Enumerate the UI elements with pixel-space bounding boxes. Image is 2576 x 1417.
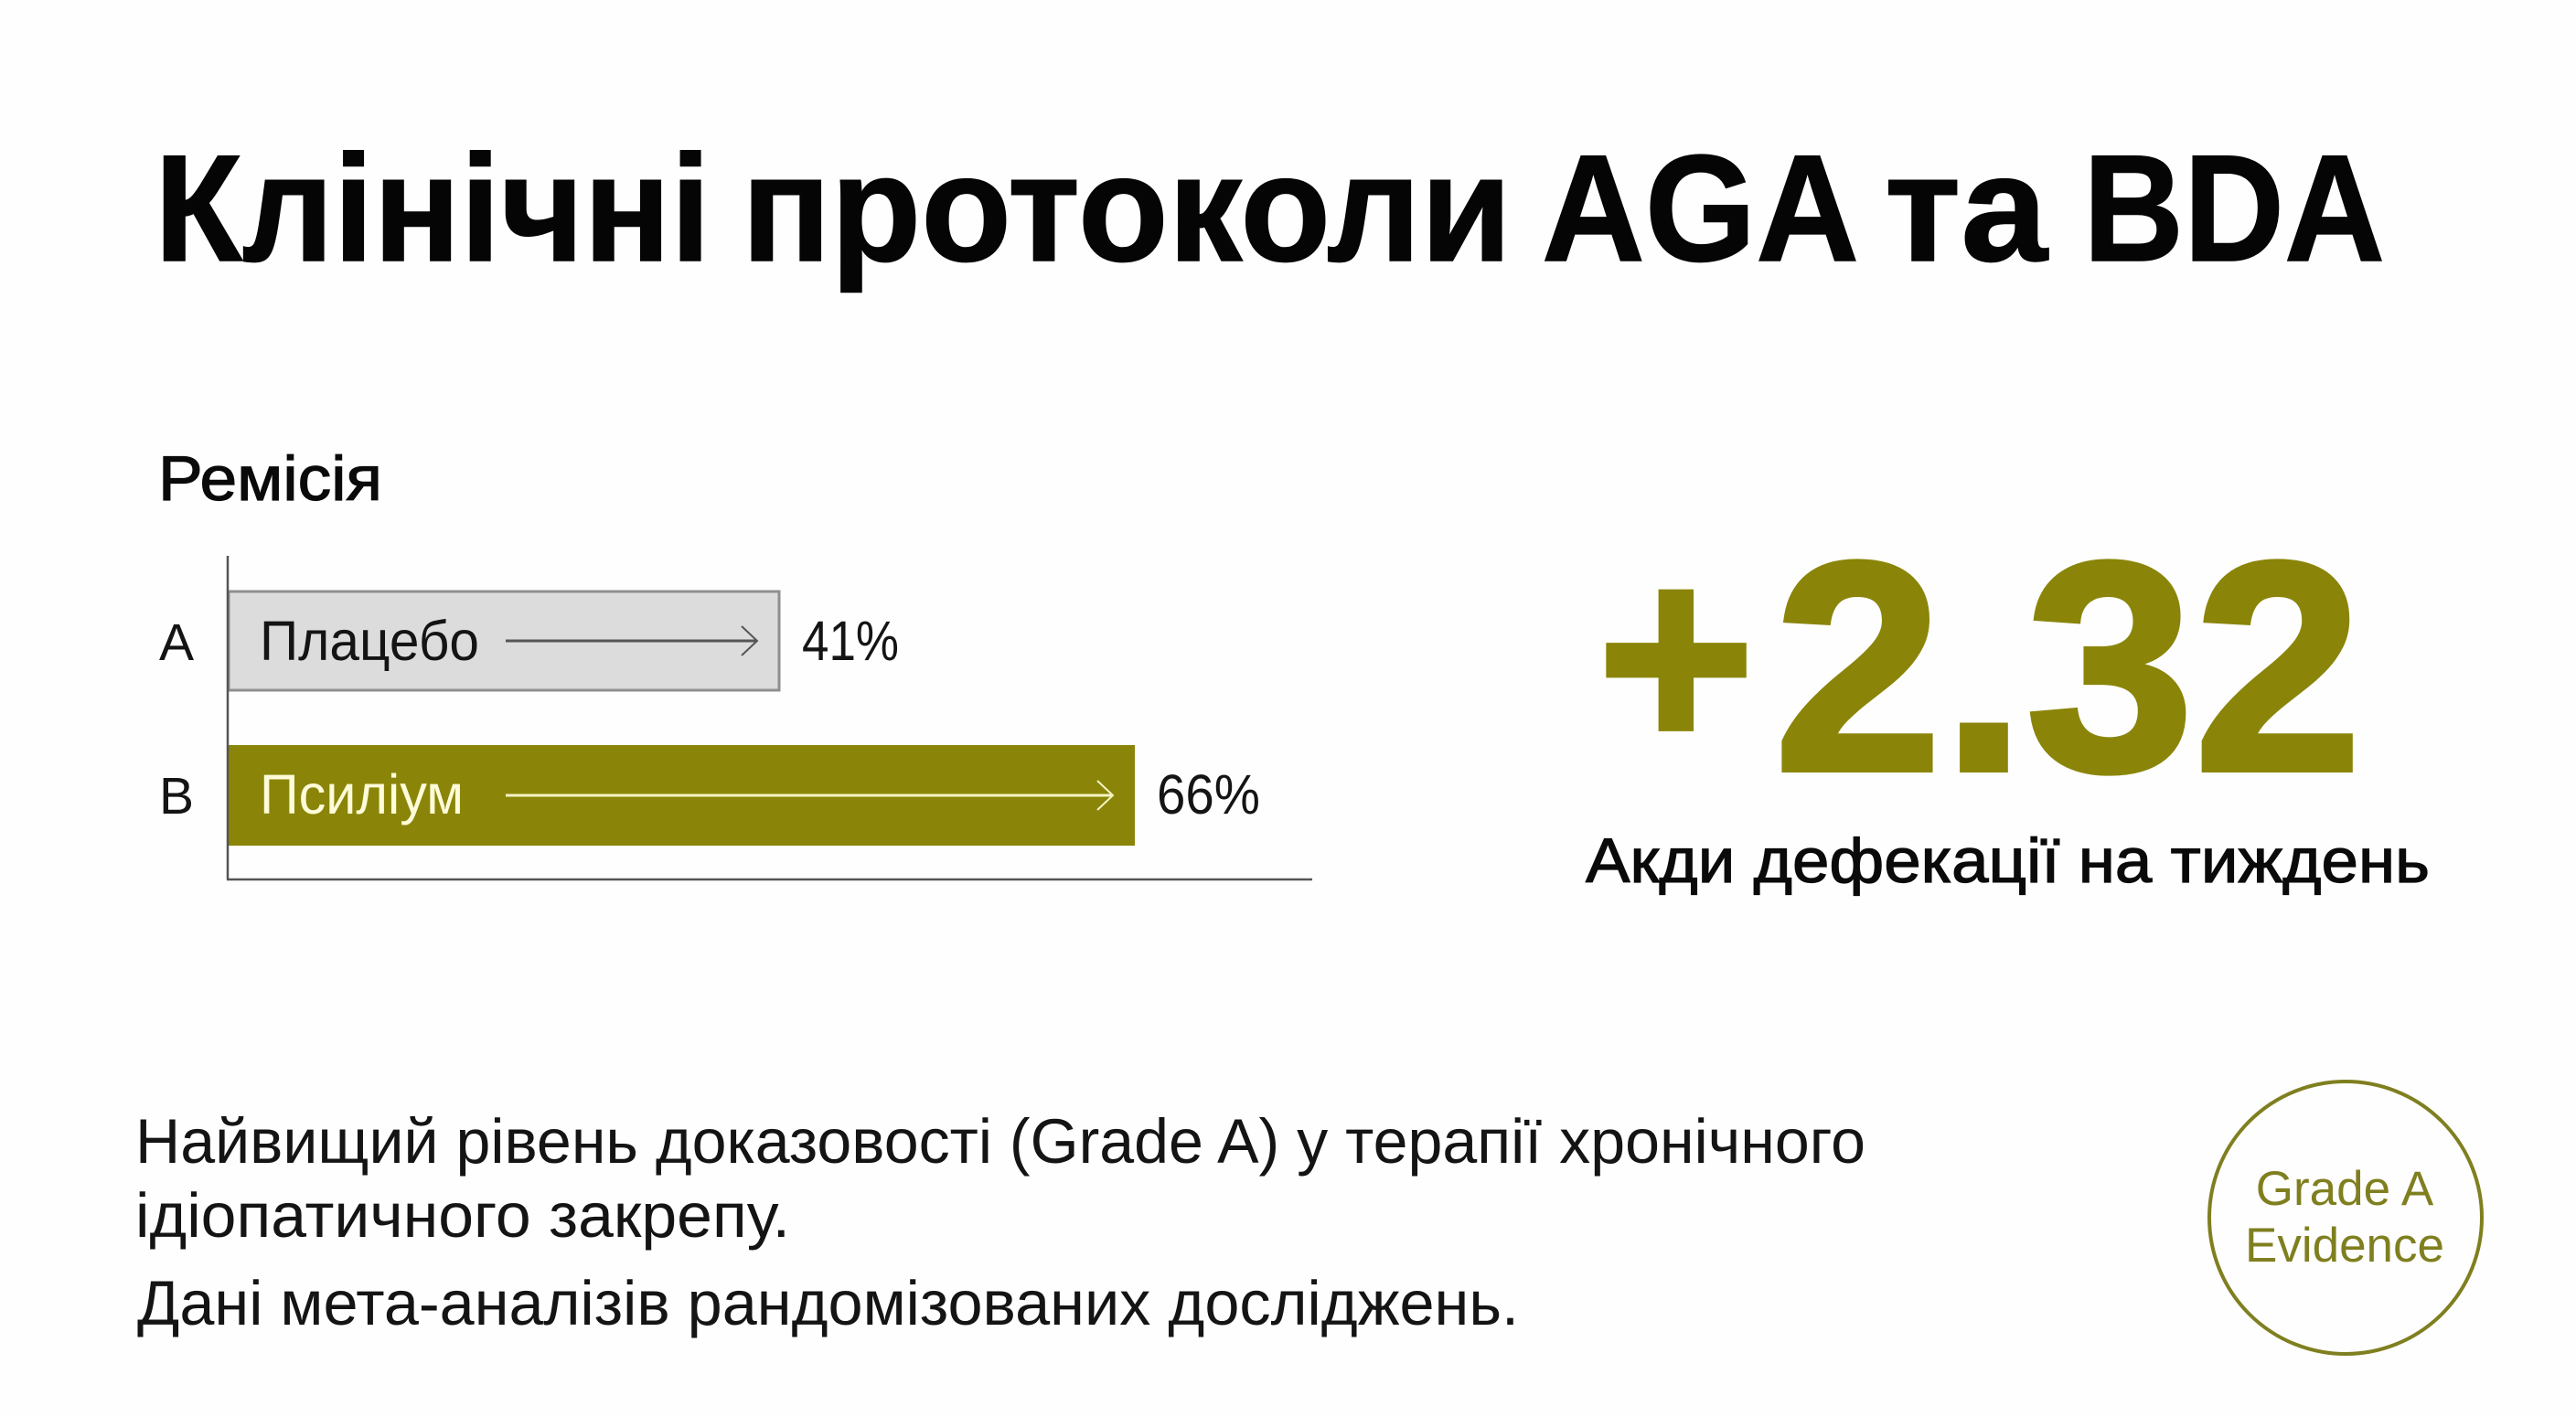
big number: 2.32 (1774, 501, 2362, 834)
bar A: placebo: Плацебо (260, 610, 479, 672)
arrow: psyllium (506, 781, 1113, 810)
title: AGA (1542, 124, 1859, 293)
bar A: placebo (229, 591, 779, 690)
arrow: placebo (506, 626, 757, 655)
title: BDA (2083, 124, 2385, 293)
chart heading: Ремісія (158, 443, 382, 514)
bar B: psyllium: Псиліум (260, 763, 464, 826)
big number: + (1598, 507, 1755, 807)
chart axes (227, 556, 1312, 879)
title: та (1885, 124, 2049, 293)
text block: evidence summary: Дані мета-аналізів рандомізованих досліджень. (137, 1268, 1519, 1338)
badge: Grade A Evidence: Grade A (2256, 1162, 2434, 1216)
panel: key statistic (1586, 501, 2430, 896)
badge: Grade A Evidence: Evidence (2245, 1219, 2444, 1273)
title: Клінічні (155, 124, 711, 293)
text block: evidence summary (135, 1106, 1865, 1338)
bar A category label: A (159, 613, 194, 672)
statistic caption: Акди дефекації на тиждень (1586, 826, 2430, 896)
title (155, 124, 2385, 293)
badge: Grade A Evidence (2209, 1081, 2482, 1354)
title: протоколи (742, 124, 1512, 293)
text block: evidence summary: ідіопатичного закрепу. (135, 1180, 790, 1251)
bar B value: 66% (1157, 763, 1260, 826)
bar A value: 41% (802, 610, 899, 672)
panel: remission bar chart (158, 443, 1312, 879)
text block: evidence summary: Найвищий рівень доказовості (Grade A) у терапії хронічного (135, 1106, 1865, 1177)
bar B category label: B (159, 767, 194, 826)
bar B: psyllium (229, 745, 1135, 846)
